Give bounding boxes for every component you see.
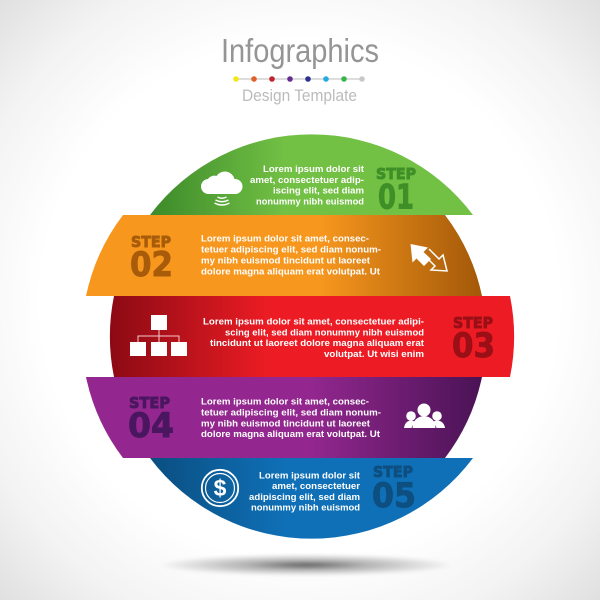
panel: step 2 orange	[86, 215, 482, 296]
text block: step 5: nonummy nibh euismod	[251, 502, 360, 514]
text block: step 1: Lorem ipsum dolor sit	[263, 164, 365, 175]
panel: step 4 purple	[86, 377, 482, 458]
icon: double arrows	[410, 244, 447, 271]
text block: step 4: my nibh euismod tincidunt ut laoreet	[201, 418, 371, 430]
label: step 05: STEP	[373, 463, 413, 481]
text block: step 2: tetuer adipiscing elit, sed diam nonum-	[201, 244, 381, 256]
text block: step 2: Lorem ipsum dolor sit amet, consec-	[201, 234, 369, 244]
text block: step 2	[201, 234, 381, 278]
text block: step 4: Lorem ipsum dolor sit amet, consec-	[201, 396, 369, 408]
text block: step 3: tincidunt ut laoreet dolore magna aliquam erat	[210, 338, 425, 349]
label: step 03: 03	[452, 326, 495, 366]
text block: step 2: my nibh euismod tincidunt ut laoreet	[201, 256, 371, 266]
text block: step 5: Lorem ipsum dolor sit	[259, 470, 361, 482]
text block: step 4	[201, 396, 381, 440]
text block: step 5: adipiscing elit, sed diam	[249, 492, 360, 503]
text block: step 5	[249, 470, 361, 514]
label: step 01: STEP	[376, 165, 416, 183]
text block: step 2: dolore magna aliquam erat volutpat. Ut	[201, 266, 381, 278]
icon: dollar coin: $	[214, 475, 227, 501]
label: step 01: 01	[378, 178, 414, 218]
icon: cloud with signal	[201, 172, 243, 205]
label: step 04: STEP	[129, 394, 170, 412]
text block: step 1: amet, consectetuer adip-	[250, 175, 364, 186]
label: step 01	[376, 165, 416, 218]
label: step 02: 02	[130, 245, 173, 285]
title: Infographics	[221, 32, 379, 69]
panel: step 1 green	[150, 134, 473, 218]
ground shadow	[158, 554, 454, 576]
label: step 02: STEP	[131, 233, 171, 251]
text block: step 4: tetuer adipiscing elit, sed diam nonum-	[201, 408, 381, 418]
text block: step 1: nonummy nibh euismod	[256, 196, 364, 208]
text block: step 3: volutpat. Ut wisi enim	[324, 349, 424, 360]
text block: step 4: dolore magna aliquam erat volutpat. Ut	[201, 429, 381, 440]
icon: org chart	[130, 315, 187, 356]
text block: step 3: scing elit, sed diam nonummy nibh euismod	[225, 328, 424, 338]
label: step 04: 04	[128, 406, 174, 446]
label: step 03: STEP	[453, 314, 493, 332]
text block: step 5: amet, consectetuer	[272, 481, 360, 492]
divider with colored dots	[233, 76, 365, 82]
icon: people	[404, 404, 445, 428]
text block: step 3: Lorem ipsum dolor sit amet, consectetuer adipi-	[203, 316, 424, 328]
text block: step 1: iscing elit, sed diam	[273, 186, 364, 196]
panel: step 5 blue	[150, 458, 473, 539]
panel: step 3 red	[110, 296, 514, 377]
subtitle: Design Template	[242, 86, 357, 105]
label: step 05: 05	[372, 476, 416, 516]
icon: dollar coin	[202, 470, 238, 506]
text block: step 1	[250, 164, 365, 208]
text block: step 3	[203, 316, 425, 360]
